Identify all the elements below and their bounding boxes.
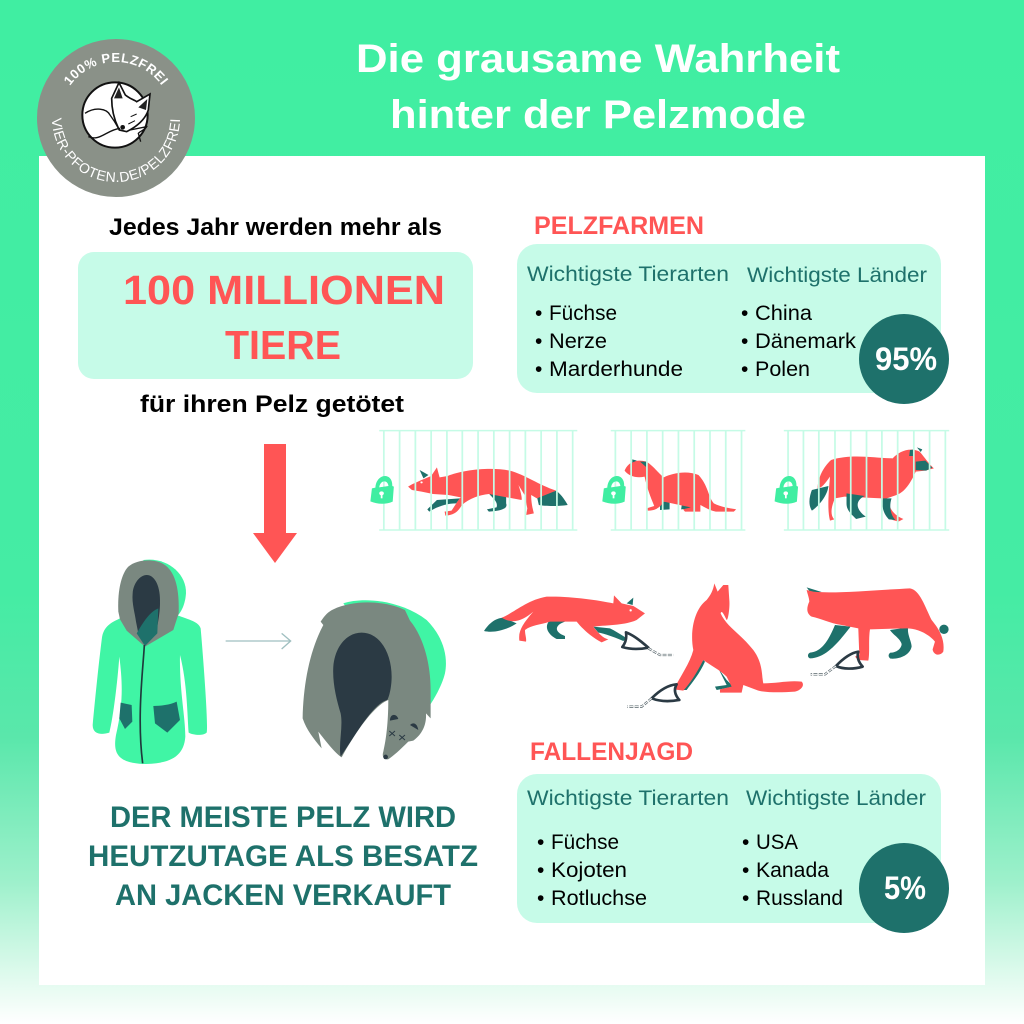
cage bars	[379, 431, 949, 530]
panel: Pelzfarmen: Dänemark	[755, 330, 857, 353]
headline block: 100 Millionen Tiere	[78, 214, 473, 418]
arrow: down	[253, 444, 297, 563]
panel: Pelzfarmen: •	[535, 302, 542, 325]
caged mink	[625, 459, 736, 512]
badge: 100% pelzfrei: 100% PELZFREI	[64, 53, 168, 86]
icon: sleeping fox	[82, 82, 150, 148]
title	[356, 37, 840, 137]
title: hinter der Pelzmode	[390, 93, 806, 137]
headline block: 100 Millionen Tiere: Jedes Jahr werden mehr als	[109, 214, 442, 241]
panel: Fallenjagd: Wichtigste Länder	[746, 787, 926, 810]
caption: fur trim	[88, 801, 478, 912]
panel: Pelzfarmen: •	[535, 330, 542, 353]
panel: Pelzfarmen: •	[741, 302, 748, 325]
panel: Pelzfarmen: China	[755, 302, 812, 325]
trapped lynx	[807, 587, 949, 674]
panel: Fallenjagd: Kojoten	[551, 859, 627, 882]
title: Die grausame Wahrheit	[356, 37, 840, 81]
panel: Fallenjagd: •	[537, 859, 544, 882]
icon: padlocks	[370, 476, 798, 504]
badge: 100% pelzfrei	[37, 39, 195, 197]
caged raccoon dog	[809, 447, 934, 522]
panel: Fallenjagd: •	[742, 887, 749, 910]
panel: Pelzfarmen: •	[535, 358, 542, 381]
badge: 100% pelzfrei: VIER-PFOTEN.DE/PELZFREI	[52, 118, 180, 182]
panel: Fallenjagd: Russland	[756, 887, 843, 910]
stat: 5%: 5%	[884, 870, 926, 906]
panel: Fallenjagd: •	[537, 831, 544, 854]
panel: Pelzfarmen: Wichtigste Tierarten	[527, 263, 729, 286]
panel: Fallenjagd	[517, 774, 949, 933]
panel: Fallenjagd: Rotluchse	[551, 887, 647, 910]
icon: jacket	[93, 560, 207, 764]
trapped coyote	[627, 583, 803, 707]
caged animals	[370, 431, 949, 530]
caption: fur trim: AN JACKEN VERKAUFT	[115, 879, 451, 912]
heading: Pelzfarmen: PELZFARMEN	[534, 212, 704, 240]
illustration: jacket and fur trim	[93, 560, 446, 764]
headline block: 100 Millionen Tiere: für ihren Pelz getötet	[140, 391, 404, 418]
headline block: 100 Millionen Tiere: 100 MILLIONEN	[123, 267, 445, 313]
panel: Pelzfarmen: Marderhunde	[549, 358, 683, 381]
trapped animals	[484, 583, 949, 707]
panel: Fallenjagd: USA	[756, 831, 798, 854]
headline block: 100 Millionen Tiere: TIERE	[225, 322, 341, 368]
trapped fox	[484, 595, 673, 655]
panel: Fallenjagd: Kanada	[756, 859, 829, 882]
panel: Pelzfarmen: •	[741, 358, 748, 381]
stat: 5%	[859, 843, 949, 933]
icon: fur trim	[303, 600, 446, 759]
panel: Fallenjagd: •	[742, 831, 749, 854]
panel: Fallenjagd: Wichtigste Tierarten	[527, 787, 729, 810]
panel: Pelzfarmen: Polen	[755, 358, 810, 381]
caption: fur trim: HEUTZUTAGE ALS BESATZ	[88, 840, 478, 873]
panel: Pelzfarmen: •	[741, 330, 748, 353]
caption: fur trim: DER MEISTE PELZ WIRD	[110, 801, 456, 834]
panel: Pelzfarmen: Nerze	[549, 330, 607, 353]
caged fox	[408, 467, 568, 516]
panel: Pelzfarmen: Füchse	[549, 302, 617, 325]
stat: 95%	[859, 314, 949, 404]
panel: Fallenjagd: •	[742, 859, 749, 882]
arrow: jacket to trim	[226, 633, 291, 649]
panel: Fallenjagd: •	[537, 887, 544, 910]
panel: Pelzfarmen	[517, 244, 949, 404]
white content panel	[39, 156, 985, 985]
panel: Pelzfarmen: Wichtigste Länder	[747, 264, 927, 287]
stat: 95%: 95%	[875, 341, 937, 377]
heading: Fallenjagd: FALLENJAGD	[530, 738, 693, 766]
panel: Fallenjagd: Füchse	[551, 831, 619, 854]
